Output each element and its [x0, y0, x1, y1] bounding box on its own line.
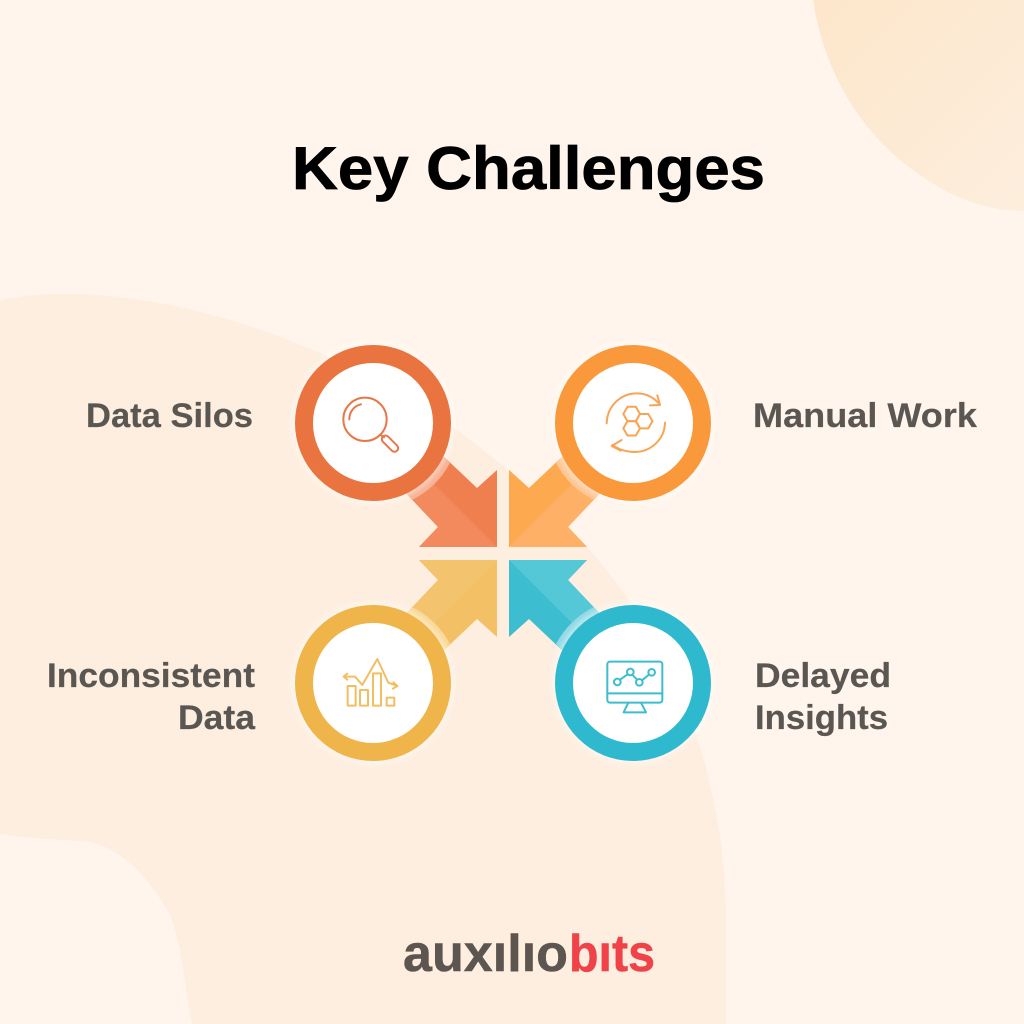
- icon: monitor with line chart: [607, 662, 662, 712]
- logo: auxiliobits: [403, 925, 655, 983]
- label: Delayed Insights: Delayed: [755, 657, 891, 695]
- background shape: bottom left corner: [0, 834, 192, 1024]
- background shape: top right corner: [813, 0, 1024, 211]
- label: Inconsistent Data: Inconsistent: [47, 657, 255, 695]
- label: Inconsistent Data: Data: [178, 699, 256, 737]
- icon: bar chart with trend line: [344, 659, 397, 706]
- circle badge: bottom left: [292, 602, 454, 764]
- label: Manual Work: Manual Work: [753, 397, 977, 435]
- arrow: top left, orange red: [403, 453, 497, 547]
- circle badge: top right: [552, 342, 714, 504]
- icon: rotating arrows with hexagons: [607, 393, 665, 452]
- label: Delayed Insights: Insights: [755, 699, 888, 737]
- arrow: bottom right, teal: [509, 560, 603, 654]
- icon: magnifying glass: [343, 398, 400, 453]
- circle badge: bottom right: [552, 602, 714, 764]
- title: Key Challenges: [292, 135, 765, 202]
- arrow: bottom left, yellow: [403, 560, 497, 654]
- arrow: top right, orange: [509, 453, 603, 547]
- circle badge: top left: [292, 342, 454, 504]
- logo: auxiliobits: bits: [569, 925, 655, 983]
- logo: auxiliobits: auxilio: [403, 925, 568, 983]
- label: Inconsistent Data: [47, 657, 256, 737]
- background shape: large left blob: [0, 294, 726, 1024]
- label: Data Silos: Data Silos: [86, 397, 253, 435]
- label: Delayed Insights: [755, 657, 891, 737]
